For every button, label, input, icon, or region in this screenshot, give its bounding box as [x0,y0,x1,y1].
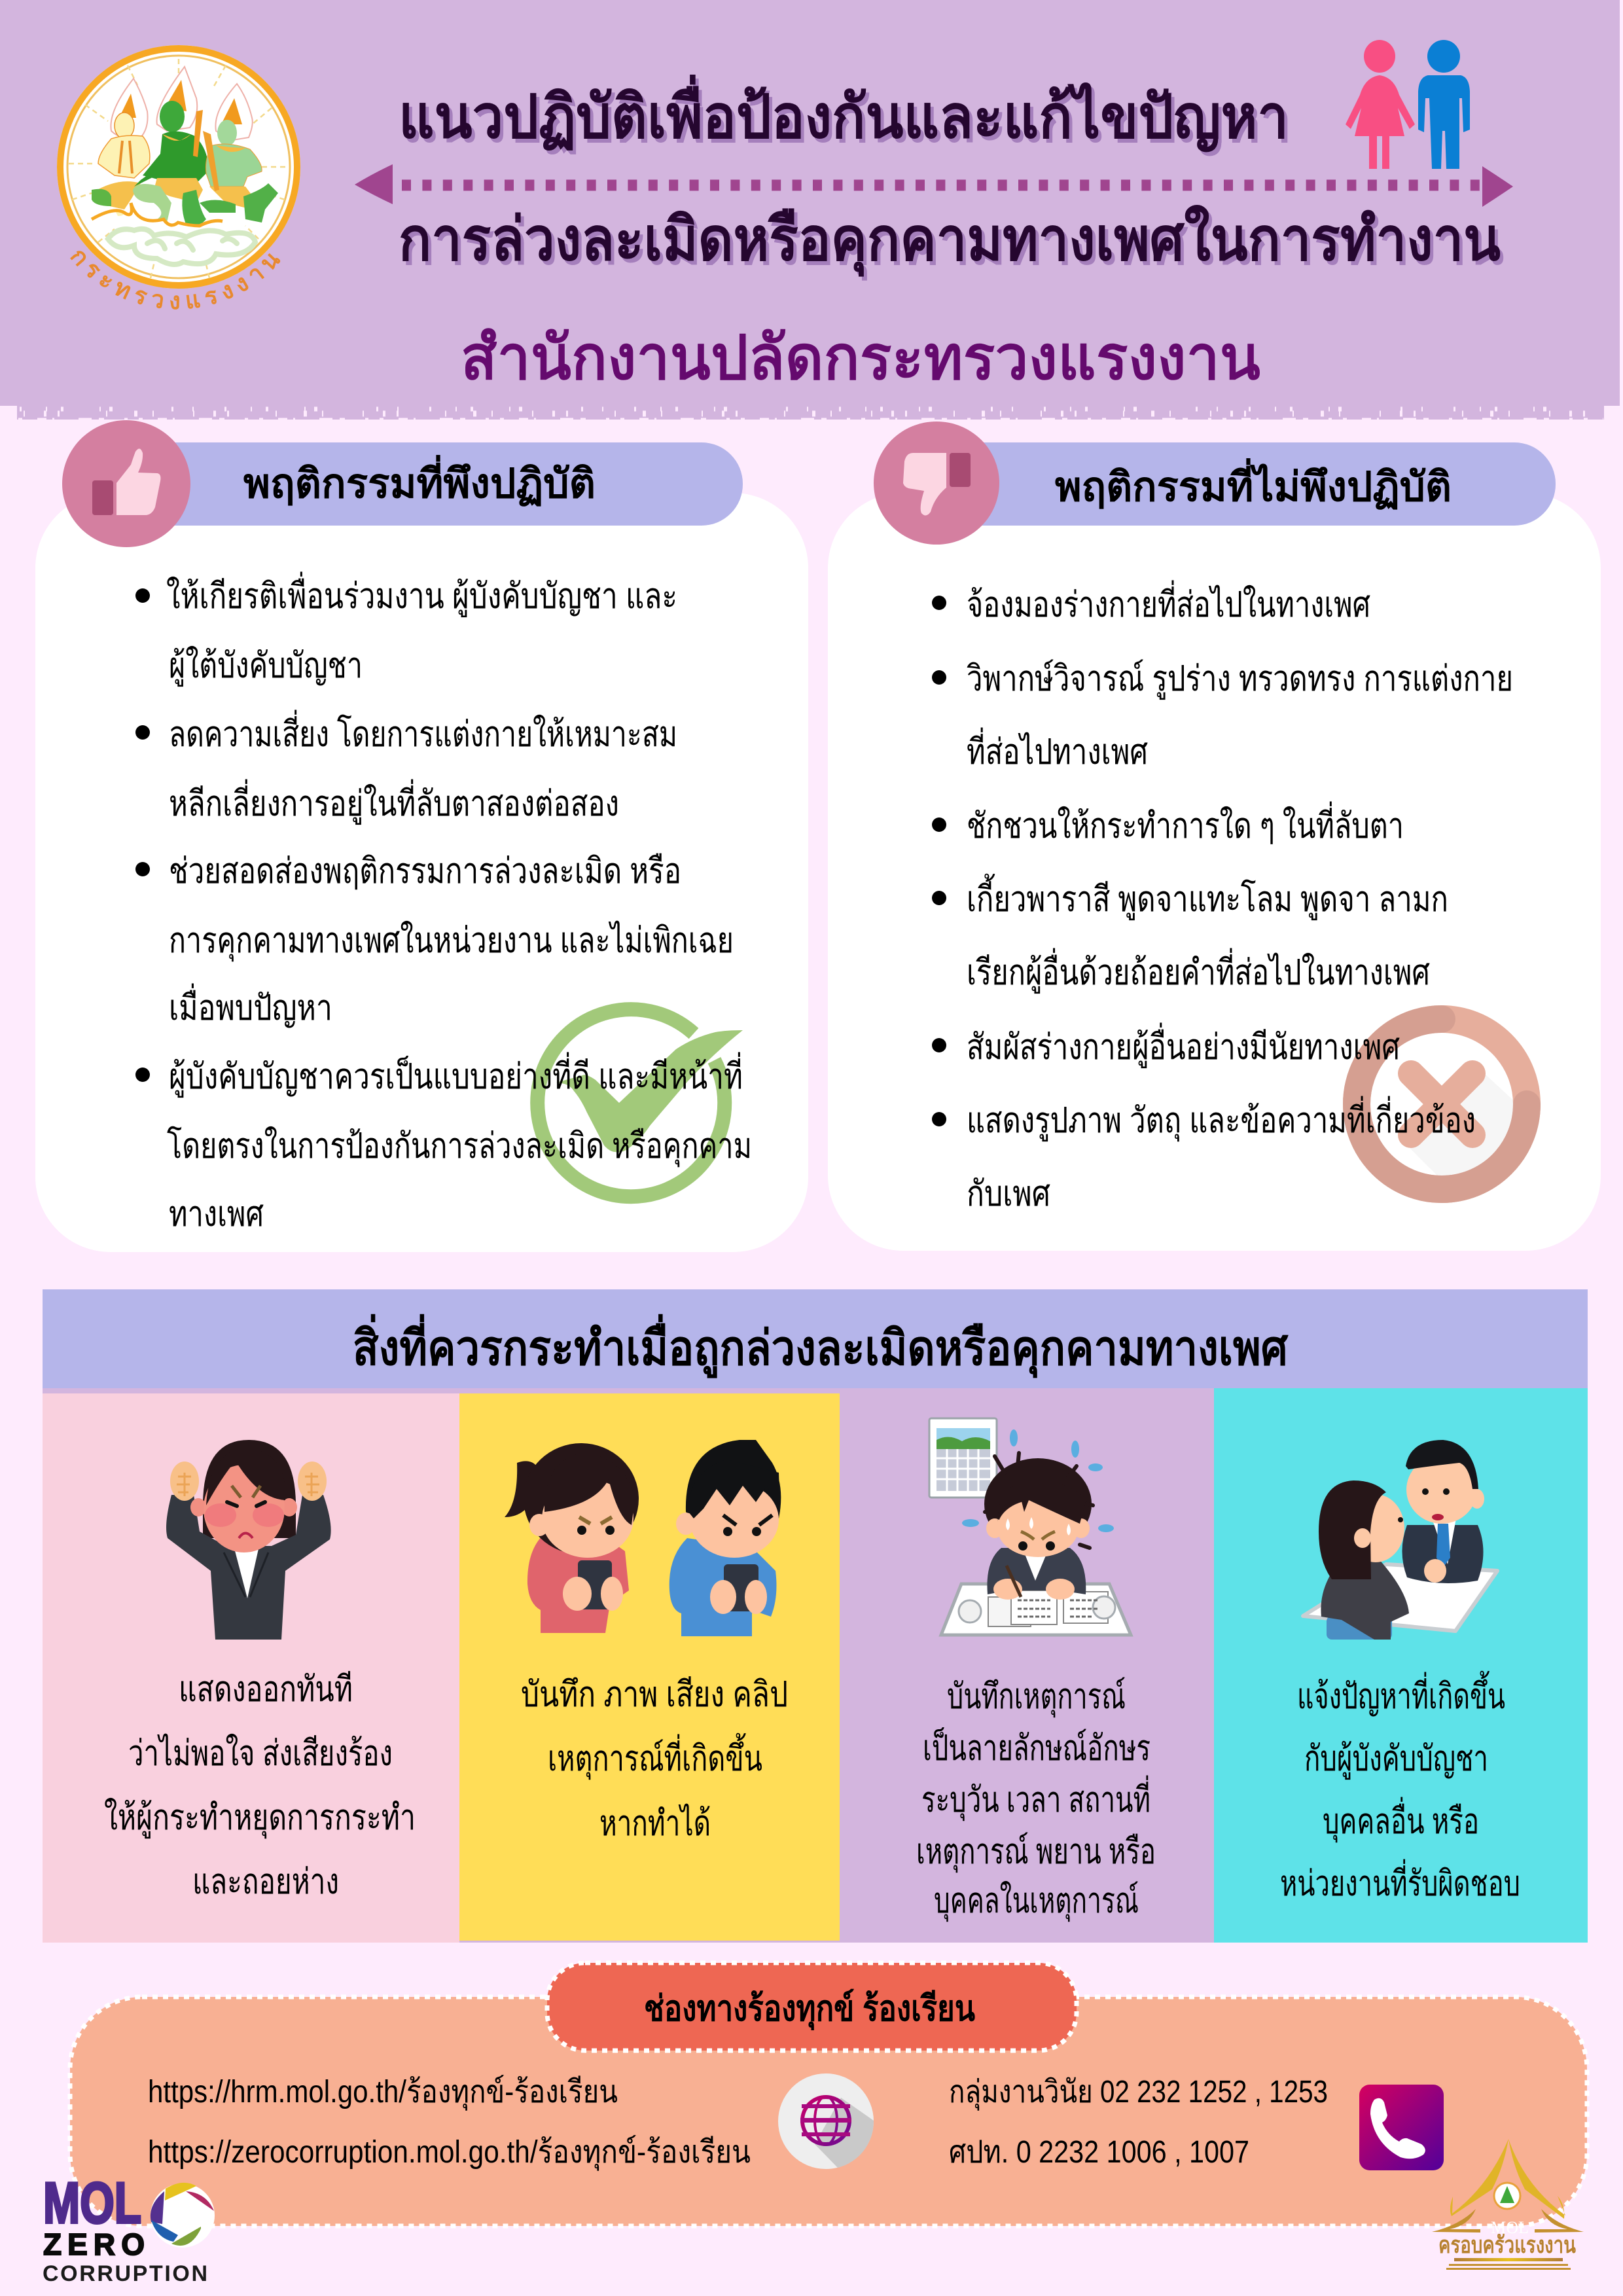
caption: หากทำได้ [599,1803,711,1843]
icon: thumbs up [62,420,190,547]
web links: https://hrm.mol.go.th/ร้องทุกข์-ร้องเรียน [148,2075,618,2111]
caption: กับผู้บังคับบัญชา [1304,1739,1488,1780]
section: what to do [43,1289,1588,1943]
caption: แจ้งปัญหาที่เกิดขึ้น [1297,1671,1505,1716]
caption: บันทึกเหตุการณ์ [947,1677,1126,1718]
phone numbers: กลุ่มงานวินัย 02 232 1252 , 1253 [949,2075,1328,2111]
heading badge: ช่องทางร้องทุกข์ ร้องเรียน [644,1988,975,2031]
bullet list: เกี้ยวพาราสี พูดจาแทะโลม พูดจา ลามก [967,874,1448,920]
bullet list: ทางเพศ [169,1194,264,1234]
icon: globe [778,2073,874,2169]
web links: https://zerocorruption.mol.go.th/ร้องทุกข์-ร้องเรียน [148,2135,751,2171]
logo: MOL family: MOL [1491,2218,1529,2237]
logo: MOL zero corruption: ZERO [43,2227,145,2261]
bullet list [135,571,752,1234]
icon: telephone [1359,2085,1444,2170]
title line 2: การล่วงละเมิดหรือคุกคามทางเพศในการทำงาน [399,205,1501,277]
icon: red cross mark [1357,1019,1527,1189]
center deity [133,67,208,226]
subtitle: office name: สำนักงานปลัดกระทรวงแรงงาน [461,323,1260,392]
right deity [200,84,278,223]
bullet list: การคุกคามทางเพศในหน่วยงาน และไม่เพิกเฉย [169,920,734,962]
caption: ระบุวัน เวลา สถานที่ [921,1775,1150,1821]
section heading bar [43,1289,1588,1388]
heading pill [124,442,743,526]
logo: MOL zero corruption: MOL [43,2170,141,2235]
column: speak up [43,1393,459,1943]
column: pink background [43,1388,459,1943]
bullet list: ผู้บังคับบัญชาควรเป็นแบบอย่างที่ดี และมีหน้าที่ [169,1052,743,1098]
bullet list: จ้องมองร่างกายที่ส่อไปในทางเพศ [967,580,1370,624]
logo: MOL zero corruption [43,2170,215,2286]
bullet list [932,580,1513,1213]
caption: บุคคลในเหตุการณ์ [934,1880,1139,1922]
heading pill [936,442,1556,526]
caption [521,1675,788,1843]
phone numbers [949,2075,1328,2170]
bullet list: แสดงรูปภาพ วัตถุ และข้อความที่เกี่ยวข้อง [967,1096,1476,1142]
bullet list: วิพากษ์วิจารณ์ รูปร่าง ทรวดทรง การแต่งกาย [967,659,1513,700]
web links [148,2075,751,2171]
caption: บันทึก ภาพ เสียง คลิป [521,1675,788,1714]
caption: แสดงออกทันที [179,1670,353,1709]
column: report [1214,1388,1588,1943]
icon: green check mark [537,1009,743,1196]
section heading bar: สิ่งที่ควรกระทำเมื่อถูกล่วงละเมิดหรือคุกคามทางเพศ [353,1314,1289,1378]
caption: ว่าไม่พอใจ ส่งเสียงร้อง [128,1733,393,1773]
header banner [0,0,1620,420]
illustration: angry woman [166,1440,331,1640]
illustration: worker writing notes [929,1418,1131,1635]
logo: MOL family [1432,2139,1584,2270]
bullet list: กับเพศ [967,1174,1050,1213]
caption: หน่วยงานที่รับผิดชอบ [1280,1859,1520,1903]
illustration: girl with phone [505,1443,639,1633]
column: write record [840,1388,1214,1943]
icon: man and woman [1346,40,1470,169]
bullet list: ที่ส่อไปทางเพศ [967,727,1148,772]
bullet list: ลดความเสี่ยง โดยการแต่งกายให้เหมาะสม [169,709,677,754]
caption: เป็นลายลักษณ์อักษร [923,1727,1150,1768]
panel: inappropriate behaviours [828,422,1601,1251]
bullet list: เมื่อพบปัญหา [169,983,332,1028]
caption: บุคคลอื่น หรือ [1323,1797,1479,1843]
caption: เหตุการณ์ที่เกิดขึ้น [548,1733,762,1780]
panel: complaint channels [70,1963,1587,2226]
double-headed dotted arrow [355,164,1513,207]
title line 1: แนวปฏิบัติเพื่อป้องกันและแก้ไขปัญหา [399,74,1289,152]
caption: ให้ผู้กระทำหยุดการกระทำ [104,1797,416,1839]
column: record evidence [459,1388,840,1943]
caption: และถอยห่าง [192,1862,339,1901]
caption [1280,1671,1520,1903]
cloud [108,229,255,264]
bullet list: เรียกผู้อื่นด้วยถ้อยคำที่ส่อไปในทางเพศ [967,948,1430,994]
bullet list: ชักชวนให้กระทำการใด ๆ ในที่ลับตา [967,801,1404,846]
illustration: consultation at a desk [1303,1440,1497,1640]
bullet list: ผู้ใต้บังคับบัญชา [169,645,363,687]
bullet list: โดยตรงในการป้องกันการล่วงละเมิด หรือคุกคาม [167,1126,752,1168]
icon: thumbs down [874,422,999,545]
logo: MOL family: ครอบครัวแรงงาน [1438,2231,1576,2258]
logo: MOL zero corruption: CORRUPTION [43,2261,207,2286]
bullet list: ให้เกียรติเพื่อนร่วมงาน ผู้บังคับบัญชา และ [166,571,677,617]
orange ribbons [92,203,223,226]
illustration: boy with phone [669,1440,781,1636]
heading pill: พฤติกรรมที่พึงปฏิบัติ [243,455,596,507]
panel: recommended behaviours [35,420,808,1252]
ministry logo: กระทรวงแรงงาน [70,251,280,310]
bullet list: หลีกเลี่ยงการอยู่ในที่ลับตาสองต่อสอง [169,779,619,825]
caption: เหตุการณ์ พยาน หรือ [916,1832,1156,1873]
bullet list: ช่วยสอดส่องพฤติกรรมการล่วงละเมิด หรือ [169,852,681,891]
bullet list: สัมผัสร่างกายผู้อื่นอย่างมีนัยทางเพศ [967,1022,1400,1068]
logo arc caption [69,257,284,309]
caption [104,1670,416,1901]
left deity [92,79,150,216]
heading pill: พฤติกรรมที่ไม่พึงปฏิบัติ [1055,458,1452,510]
caption [916,1677,1156,1922]
phone numbers: ศปท. 0 2232 1006 , 1007 [949,2135,1249,2170]
heading badge [547,1963,1077,2051]
ministry logo [57,45,300,310]
